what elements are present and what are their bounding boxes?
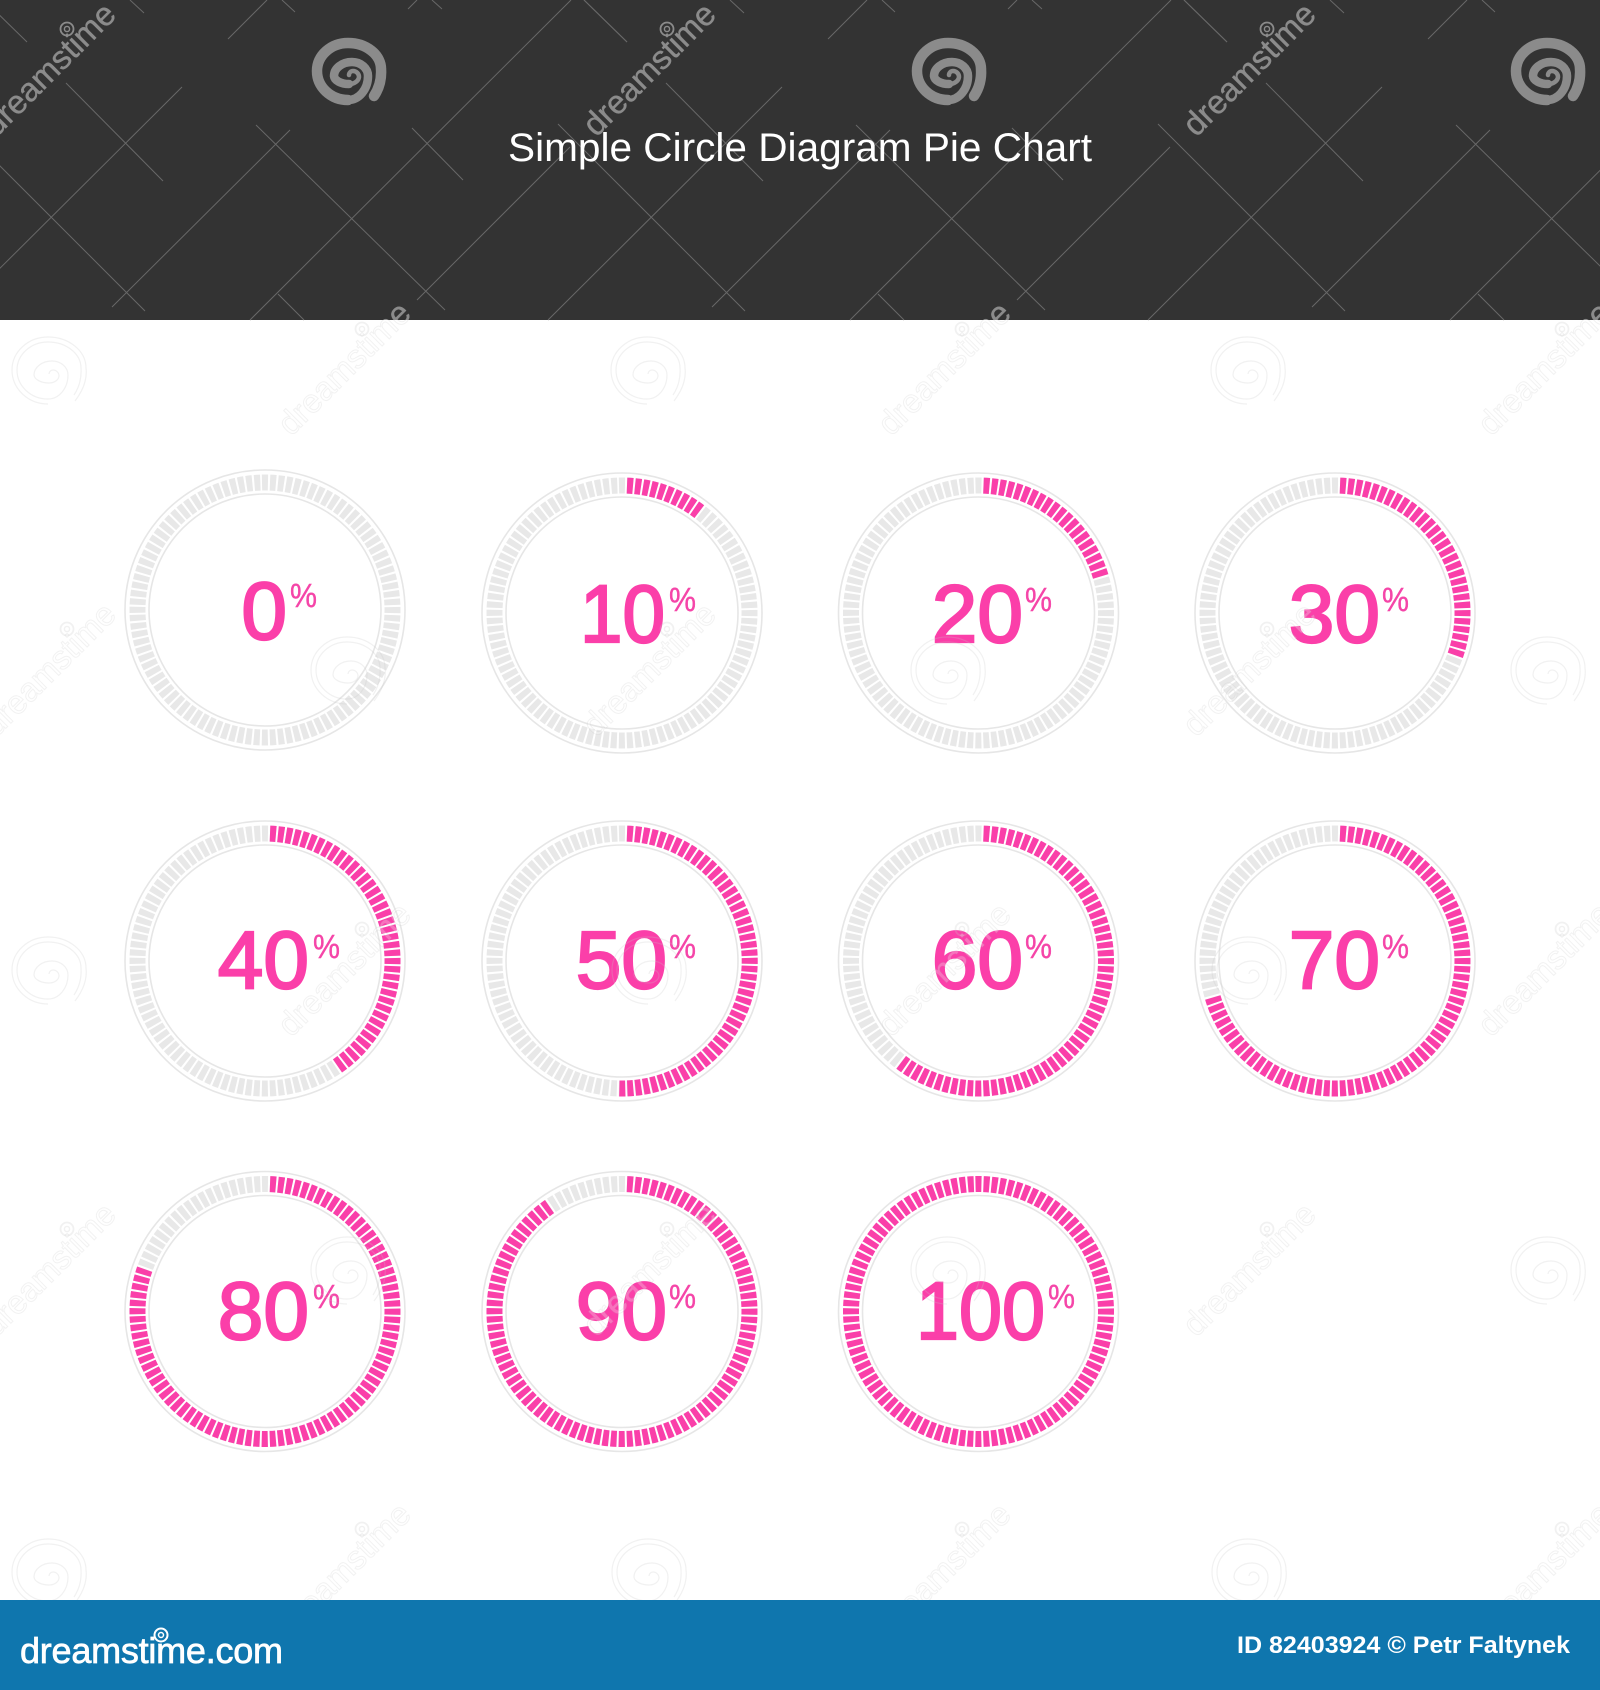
gauge 80%: 80 bbox=[218, 1266, 309, 1357]
footer band bbox=[0, 1600, 1600, 1690]
gauge 90%: % bbox=[669, 1278, 696, 1315]
gauge 30%: 30 bbox=[1289, 569, 1380, 660]
gauge 20%: % bbox=[1025, 581, 1052, 618]
gauge 0% bbox=[125, 470, 405, 750]
faint watermarks over white area bbox=[0, 294, 1600, 1643]
gauge 70%: 70 bbox=[1289, 915, 1380, 1006]
faint watermarks over white area: dreamstime bbox=[270, 294, 418, 442]
gauge 70%: % bbox=[1382, 928, 1409, 965]
title: Simple Circle Diagram Pie Chart bbox=[508, 126, 1092, 170]
gauge 10% bbox=[482, 473, 762, 753]
gauge 0%: % bbox=[290, 577, 317, 614]
faint watermarks over white area: dreamstime bbox=[575, 1195, 723, 1343]
gauge 80% bbox=[125, 1172, 405, 1452]
faint watermarks over white area: dreamstime bbox=[575, 595, 723, 743]
gauge 0%: 0 bbox=[241, 566, 287, 657]
gauge 30% bbox=[1195, 473, 1475, 753]
faint watermarks over white area: dreamstime bbox=[870, 895, 1018, 1043]
faint watermarks over white area: dreamstime bbox=[270, 895, 418, 1043]
image credit: ID 82403924 © Petr Faltynek bbox=[1237, 1632, 1571, 1659]
faint watermarks over white area: dreamstime bbox=[1175, 595, 1323, 743]
gauge 10%: 10 bbox=[580, 569, 665, 660]
gauge 60% bbox=[838, 821, 1118, 1101]
header band: dreamstime bbox=[870, 294, 1018, 442]
gauge 100%: % bbox=[1048, 1278, 1075, 1315]
gauge 50%: % bbox=[669, 928, 696, 965]
gauge 30%: % bbox=[1382, 581, 1409, 618]
gauge 100%: 100 bbox=[916, 1266, 1045, 1357]
header band bbox=[0, 0, 1600, 320]
gauge 90%: 90 bbox=[576, 1266, 667, 1357]
gauge 20%: 20 bbox=[932, 569, 1023, 660]
gauge 40% bbox=[125, 821, 405, 1101]
gauge 50% bbox=[482, 821, 762, 1101]
gauge 10%: % bbox=[669, 581, 696, 618]
gauge 40%: % bbox=[313, 928, 340, 965]
gauge 80%: % bbox=[313, 1278, 340, 1315]
gauge 50%: 50 bbox=[576, 915, 667, 1006]
header band: dreamstime bbox=[270, 294, 418, 442]
gauge 60%: % bbox=[1025, 928, 1052, 965]
faint watermarks over white area: dreamstime bbox=[870, 1495, 1018, 1643]
gauge 40%: 40 bbox=[218, 915, 309, 1006]
gauge 20% bbox=[838, 473, 1118, 753]
faint watermarks over white area: dreamstime bbox=[870, 294, 1018, 442]
gauge 100% bbox=[838, 1172, 1118, 1452]
gauge 90% bbox=[482, 1172, 762, 1452]
gauge 60%: 60 bbox=[932, 915, 1023, 1006]
faint watermarks over white area: dreamstime bbox=[270, 1495, 418, 1643]
gauge 70% bbox=[1195, 821, 1475, 1101]
faint watermarks over white area: dreamstime bbox=[1175, 1195, 1323, 1343]
footer logo: dreamstime.com bbox=[20, 1630, 283, 1671]
